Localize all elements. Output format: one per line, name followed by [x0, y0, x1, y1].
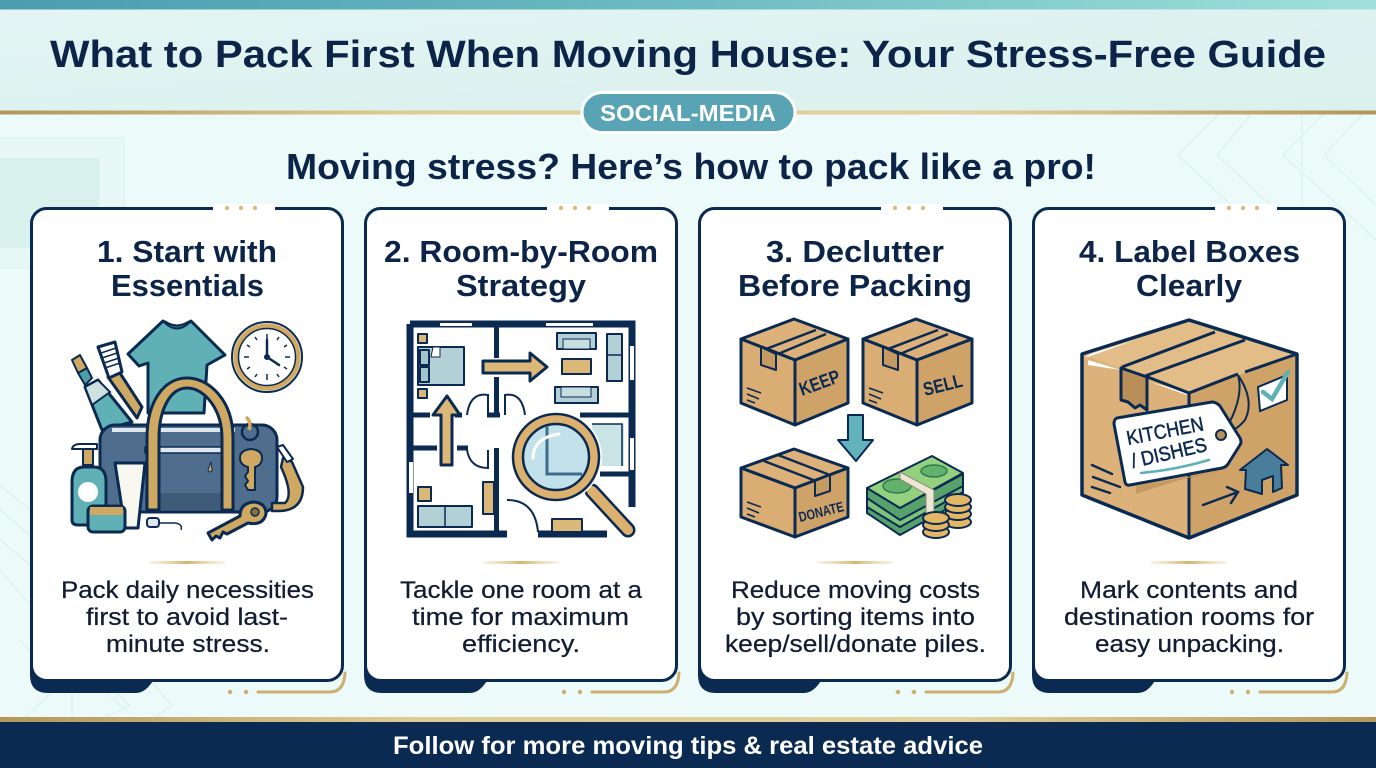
heading: declutter before packing: 3. Declutter — [766, 234, 944, 269]
divider — [149, 561, 225, 564]
heading: declutter before packing — [738, 234, 972, 303]
description — [61, 577, 314, 658]
tag pill — [582, 92, 795, 132]
subtitle: Moving stress? Here’s how to pack like a pro! — [286, 146, 1096, 187]
description: Mark contents and — [1080, 577, 1298, 604]
description: first to avoid last- — [86, 604, 288, 631]
footer band: Follow for more moving tips & real estate advice — [393, 732, 983, 760]
description — [725, 577, 986, 658]
description: easy unpacking. — [1095, 631, 1284, 658]
heading: start with essentials: 1. Start with — [97, 234, 277, 269]
icon: keep box — [741, 319, 848, 425]
header band — [0, 9, 1376, 112]
icon: labelled box — [1082, 320, 1297, 538]
divider — [817, 561, 893, 564]
divider — [483, 561, 559, 564]
description: efficiency. — [462, 631, 580, 658]
heading: label boxes clearly — [1079, 234, 1300, 303]
description: keep/sell/donate piles. — [725, 631, 986, 658]
footer band — [0, 722, 1376, 768]
heading: start with essentials — [97, 234, 277, 303]
description: Tackle one room at a — [400, 577, 643, 604]
heading: room-by-room strategy: Strategy — [456, 268, 587, 303]
description: minute stress. — [106, 631, 270, 658]
icon: labelled box: / DISHES — [1129, 434, 1209, 473]
icon: donate box — [741, 449, 848, 537]
footer gold rule — [0, 717, 1376, 722]
heading: room-by-room strategy — [384, 234, 658, 303]
description — [400, 577, 643, 658]
gold header rule — [0, 110, 1376, 114]
description: destination rooms for — [1064, 604, 1314, 631]
top accent bar — [0, 0, 1376, 10]
icon: keep box: KEEP — [797, 367, 843, 401]
description: Reduce moving costs — [731, 577, 980, 604]
heading: start with essentials: Essentials — [111, 268, 264, 303]
description — [1064, 577, 1314, 658]
panel: label boxes clearly — [1032, 204, 1347, 694]
heading: room-by-room strategy: 2. Room-by-Room — [384, 234, 658, 269]
description: Pack daily necessities — [61, 577, 314, 604]
icon: labelled box: KITCHEN — [1125, 413, 1206, 450]
heading: label boxes clearly: Clearly — [1136, 268, 1243, 303]
heading: label boxes clearly: 4. Label Boxes — [1079, 234, 1300, 269]
icon: donate box: DONATE — [797, 498, 845, 525]
icon: packed bag with essentials — [72, 321, 303, 540]
panel: room-by-room strategy — [364, 204, 679, 694]
icon: sell box: SELL — [921, 371, 965, 401]
heading: declutter before packing: Before Packing — [738, 268, 972, 303]
description: time for maximum — [412, 604, 629, 631]
icon: cash and coins — [867, 456, 971, 538]
panel: start with essentials — [30, 204, 345, 694]
background pattern — [0, 113, 1376, 717]
divider — [1151, 561, 1227, 564]
icon: sell box — [863, 319, 972, 425]
icon: floor plan with magnifier — [409, 323, 634, 534]
panel: declutter before packing — [698, 204, 1013, 694]
description: by sorting items into — [736, 604, 975, 631]
title: What to Pack First When Moving House: Your Stress-Free Guide — [50, 34, 1326, 76]
arrow: down — [838, 415, 873, 461]
tag pill: SOCIAL-MEDIA — [600, 100, 776, 126]
